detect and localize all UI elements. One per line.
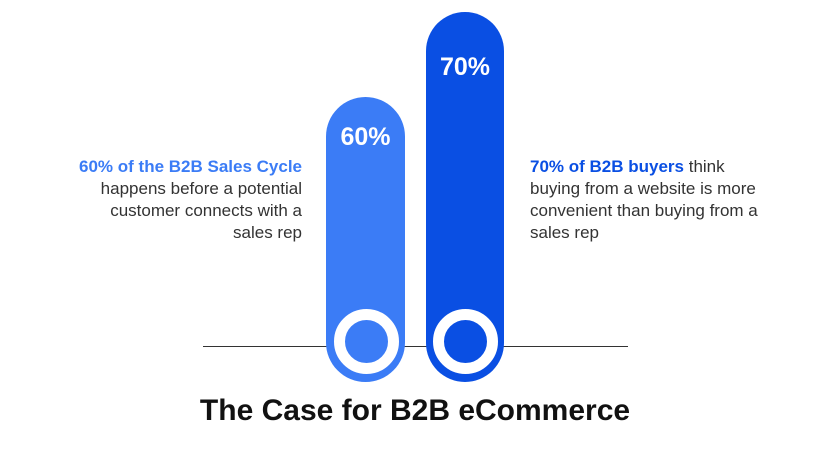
text: left: sales rep bbox=[233, 223, 302, 242]
text: right: 70% of B2B buyers think bbox=[530, 157, 725, 176]
text: left bbox=[79, 157, 302, 242]
icon: ring right bbox=[433, 309, 498, 374]
baseline bbox=[203, 346, 628, 347]
text: left: happens before a potential bbox=[101, 179, 302, 198]
icon: ring left bbox=[334, 309, 399, 374]
bar: 60% bbox=[326, 97, 405, 382]
text: right: convenient than buying from a bbox=[530, 201, 758, 220]
text: left: customer connects with a bbox=[110, 201, 302, 220]
bar: 70% bbox=[426, 12, 504, 382]
text: right: buying from a website is more bbox=[530, 179, 756, 198]
text: left: 60% of the B2B Sales Cycle bbox=[79, 157, 302, 176]
title: The Case for B2B eCommerce bbox=[200, 394, 630, 427]
text: right bbox=[530, 157, 758, 242]
text: right: sales rep bbox=[530, 223, 599, 242]
label: 70%: 70% bbox=[440, 53, 490, 81]
label: 60%: 60% bbox=[340, 123, 391, 151]
